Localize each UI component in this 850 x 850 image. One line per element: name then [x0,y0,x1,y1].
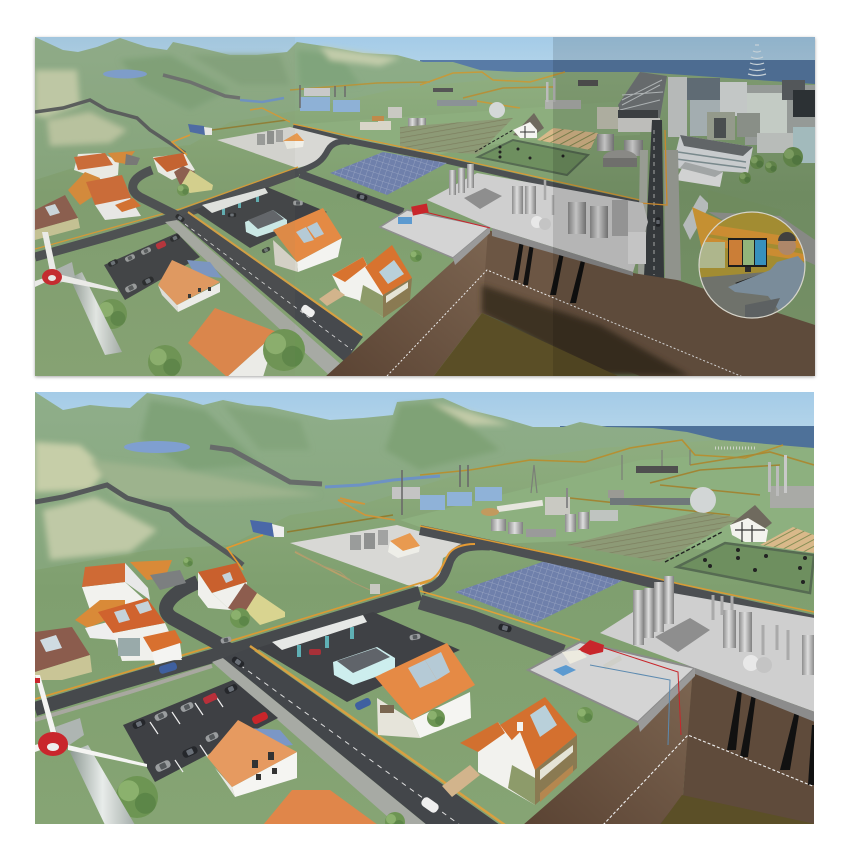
houses along curved road [153,153,213,196]
house peach roof [158,260,222,312]
gas station shop [245,210,287,237]
main east-west road [35,172,298,257]
signal icon [748,45,766,76]
transformer station [392,465,502,515]
biomass plant [481,488,618,537]
houses along curved road [198,563,285,628]
dome and factory [433,78,598,118]
gas station canopy [272,615,421,657]
white car on road [420,796,440,814]
data screen [728,238,767,272]
substation house [283,133,304,149]
river [240,98,284,102]
cable on second road [420,591,580,640]
underground floor [433,313,620,377]
mountains [35,392,720,570]
orange cable along long road [420,526,814,612]
gas station lot [257,612,460,702]
power lines far left [227,498,395,580]
map screen [698,242,725,268]
city trees [739,147,803,184]
sky [35,392,814,462]
underground back wall [482,230,815,376]
orange cable along long road [293,124,640,200]
wind turbine [35,232,122,355]
dome and treatment plant [608,448,814,513]
operator [728,232,810,322]
sky [35,37,815,62]
distant plain and far lines [400,440,814,560]
main north-south road [165,212,363,376]
sidewalk west [35,666,212,720]
panel shadow [35,37,815,376]
orange cable on east-west road [35,167,298,249]
houses upper left cluster [68,151,141,220]
well slots [727,688,815,785]
house with brown roof [35,627,92,680]
mountains [35,37,553,180]
winding road [35,485,243,565]
sea [420,60,815,84]
house with solar roof (centre) [354,643,475,738]
panel: lower close view [35,392,815,832]
second road [420,602,563,652]
underground outer wall [523,670,693,825]
sand path [319,288,345,306]
underground earth outer wall [325,230,492,377]
power lines [172,72,565,155]
substation plate [290,525,467,587]
right building with green roof [683,190,815,265]
circle background [695,210,810,322]
underground floor [660,795,815,825]
large industrial plate [427,164,648,276]
dashed boundary [387,270,743,377]
cow pen [677,543,814,593]
mountain relief [35,400,510,560]
main north-south road [212,636,505,825]
small plate with equipment [380,203,490,265]
S-curve road [423,546,490,590]
small box [370,584,380,594]
substation house [388,533,420,558]
river [325,476,440,487]
trees [97,299,305,379]
transformers [257,130,283,145]
winding road [35,100,185,153]
gas station shop [333,647,395,685]
underground shadow [482,285,690,376]
second road [300,174,403,212]
mountain relief [35,47,400,146]
ground [35,72,815,376]
S-curve road [297,141,350,172]
crop field [537,128,598,150]
biogas and tank plant [360,107,426,130]
sea [560,426,814,456]
dashed boundary [603,735,815,825]
callout wedge [692,207,725,250]
lake [124,441,190,453]
black car [356,194,368,200]
hospital building [672,135,753,173]
striped field [567,512,740,562]
circle border [699,212,805,318]
parking lot [104,233,200,300]
distant plain [350,108,538,154]
fold tint right [553,37,815,376]
house with brown roof [35,195,80,240]
farm house [513,113,544,138]
gas station canopy [202,188,303,217]
ground [35,432,814,824]
dashed path [665,532,722,562]
truck [250,520,284,537]
trees [116,776,405,832]
gas station lot [193,187,327,248]
cutaway house [332,245,412,318]
farm house [730,505,772,542]
small plate with equipment [528,640,695,745]
long road [420,530,814,620]
transformer station [300,85,360,112]
underground back wall [660,668,815,824]
black car [498,623,512,633]
parking lot [123,680,278,782]
cutaway house [460,697,577,805]
substation plate [217,127,342,168]
callout circle: control room [695,210,810,322]
solar farm [455,560,628,623]
small tree [577,707,593,723]
cable on S-curve [420,544,475,584]
house peach roof [207,720,297,797]
crop field [760,527,814,553]
main east-west road [35,593,420,709]
solar farm [330,152,447,195]
house bottom [263,790,378,825]
blue car [158,662,178,674]
lake [103,70,147,78]
panel scene [35,37,815,379]
storage silos [597,134,643,167]
well slots [513,240,585,303]
cow pen [478,140,588,175]
brown field [400,118,513,154]
vertical city road [638,120,681,280]
small tree [410,250,422,262]
tree by house [427,709,445,727]
truck [188,124,212,135]
keyboard [735,275,765,286]
panel: upper wide view [35,37,815,379]
house with solar roof (centre) [261,208,342,272]
penstock [210,447,322,484]
fold tint left [35,37,295,376]
houses upper left cluster [75,557,193,665]
wind turbine [35,675,147,825]
white villa [676,162,723,187]
sand path [442,765,480,797]
orange cable east-west [35,580,430,699]
curved road to houses [166,582,230,650]
house bottom [188,308,277,377]
large industrial plate [600,576,815,722]
curved road to houses [133,170,180,217]
pylons [531,450,690,493]
transformers [350,530,388,550]
dashed path [475,130,513,152]
long road [293,127,645,205]
fence line [295,551,370,590]
city skyline [597,72,815,163]
penstock [163,75,240,98]
